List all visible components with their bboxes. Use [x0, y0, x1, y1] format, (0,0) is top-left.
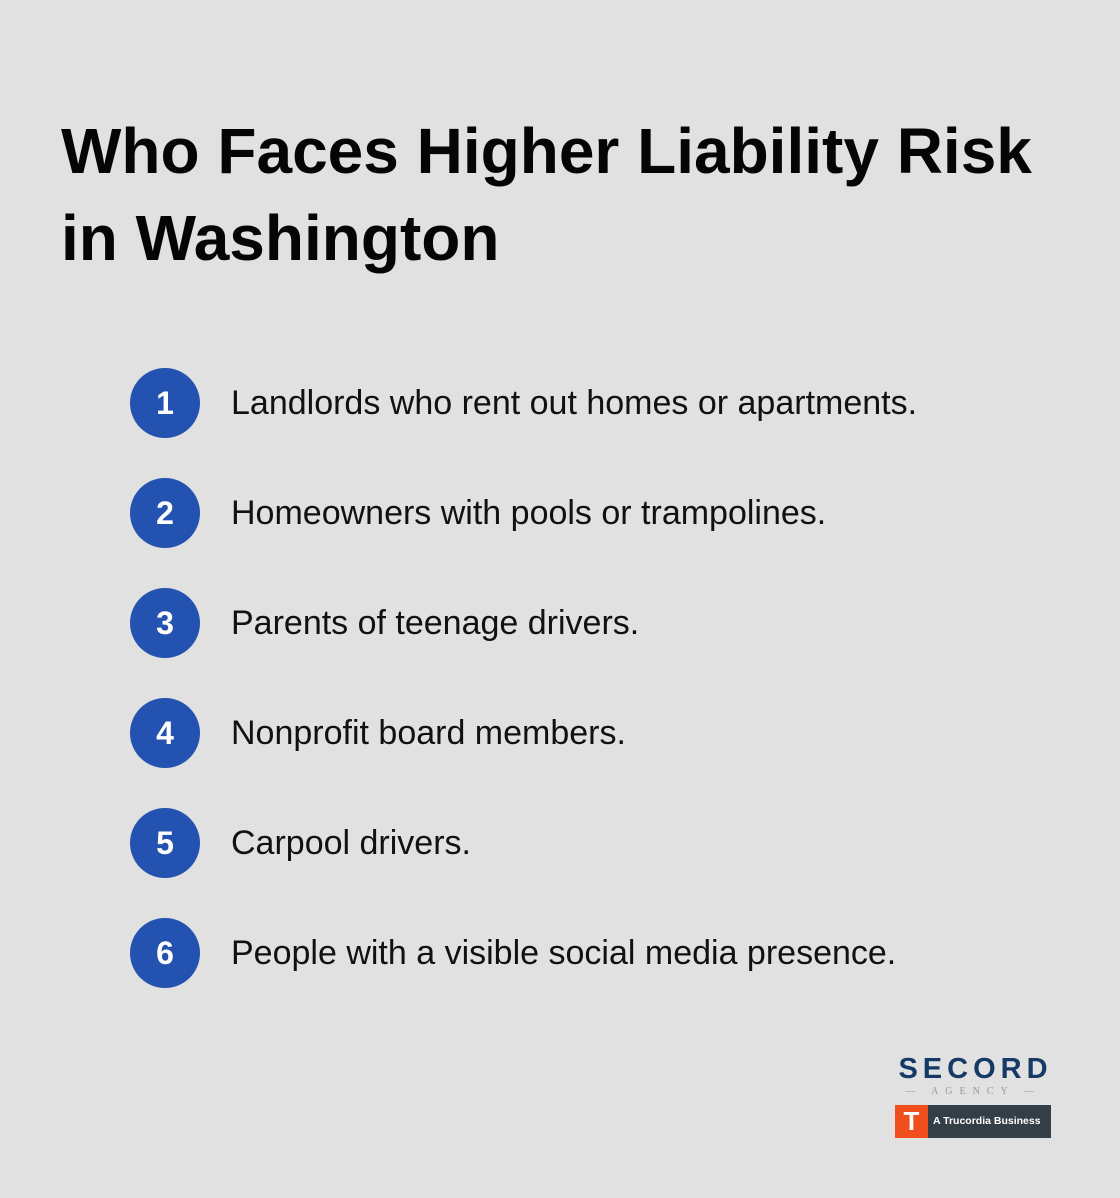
logo: trucordia badge: T	[904, 1106, 919, 1136]
item 1: Landlords who rent out homes or apartments.	[231, 384, 917, 422]
item 5	[130, 808, 471, 878]
item 4	[130, 698, 626, 768]
title	[61, 115, 1032, 274]
item 3: Parents of teenage drivers.	[231, 604, 639, 642]
item 1: 1	[156, 385, 174, 421]
item 6: People with a visible social media presence.	[231, 934, 896, 972]
logo: — AGENCY —	[905, 1086, 1041, 1097]
item 4: Nonprofit board members.	[231, 714, 626, 752]
item 2: Homeowners with pools or trampolines.	[231, 494, 826, 532]
logo: secord agency: SECORD	[898, 1053, 1053, 1085]
title: in Washington	[61, 202, 499, 274]
item 2: 2	[156, 495, 174, 531]
item 3: 3	[156, 605, 174, 641]
item 1	[130, 368, 917, 438]
item 4: 4	[156, 715, 174, 751]
item 5: Carpool drivers.	[231, 824, 471, 862]
logo: trucordia badge: A Trucordia Business	[933, 1115, 1041, 1127]
title: Who Faces Higher Liability Risk	[61, 115, 1032, 187]
item 6	[130, 918, 896, 988]
item 5: 5	[156, 825, 174, 861]
item 3	[130, 588, 639, 658]
item 6: 6	[156, 935, 174, 971]
logo	[895, 1053, 1053, 1138]
logo: trucordia badge	[895, 1105, 1051, 1138]
item 2	[130, 478, 826, 548]
